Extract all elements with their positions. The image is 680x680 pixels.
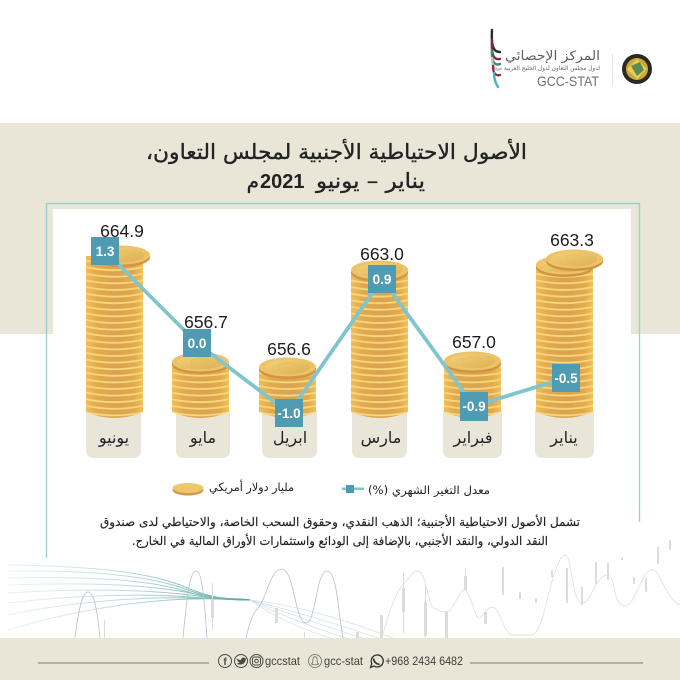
decorative background chart <box>8 555 680 638</box>
value labels: 656.6 <box>267 339 311 359</box>
description text: تشمل الأصول الاحتياطية الأجنبية؛ الذهب النقدي، وحقوق السحب الخاصة، والاحتياطي لدى صندوق <box>100 514 580 530</box>
month labels: ابريل <box>273 428 307 448</box>
logo subtitle: لدول مجلس التعاون لدول الخليج العربية <box>504 65 600 72</box>
icon: instagram <box>250 654 263 668</box>
month labels: مارس <box>361 428 401 448</box>
white chart panel <box>53 209 631 638</box>
phone number: +968 2434 6482 <box>385 654 463 668</box>
footer contact bar <box>38 654 643 668</box>
month labels: فبراير <box>452 428 493 448</box>
change markers <box>91 237 580 427</box>
logo Arabic name: المركز الإحصائي <box>505 49 600 64</box>
coin stack: March <box>351 260 408 418</box>
icon: whatsapp <box>370 655 383 668</box>
handle: gccstat: gccstat <box>265 654 301 668</box>
icon: facebook: f <box>223 657 227 668</box>
logo GCC-STAT wordmark: GCC-STAT <box>537 73 599 89</box>
change markers: -1.0 <box>277 406 301 421</box>
decorative candlesticks <box>104 540 671 638</box>
value labels <box>100 221 594 359</box>
line: monthly change rate <box>105 251 566 413</box>
description text: النقد الدولي، والنقد الأجنبي، بالإضافة إلى الودائع واستثمارات الأوراق المالية في الخارج. <box>132 533 548 549</box>
value labels: 664.9 <box>100 221 144 241</box>
legend: coin <box>172 479 294 496</box>
value labels: 656.7 <box>184 312 228 332</box>
coin stack: February <box>444 352 501 418</box>
change markers: -0.9 <box>462 399 486 414</box>
month labels: يناير <box>549 428 578 448</box>
footer band <box>0 638 680 680</box>
icon: facebook <box>218 654 232 668</box>
month label boxes <box>86 405 594 458</box>
change markers: 0.0 <box>188 336 206 351</box>
title: م <box>247 169 259 193</box>
icon: snapchat <box>308 654 322 668</box>
legend: line: معدل التغير الشهري (%) <box>368 483 490 498</box>
emblem <box>622 54 652 84</box>
change markers: 0.9 <box>373 272 391 287</box>
description text <box>100 514 580 549</box>
coin stack: April <box>259 358 316 418</box>
beige title band <box>0 123 680 334</box>
month labels: مايو <box>189 428 216 448</box>
coin stack: June <box>86 246 150 418</box>
logo ribbon <box>492 30 501 87</box>
icon: twitter <box>234 654 248 668</box>
handle: gcc-stat: gcc-stat <box>324 654 364 668</box>
title <box>146 139 527 193</box>
title: الأصول الاحتياطية الأجنبية لمجلس التعاون، <box>146 139 527 164</box>
month labels: يونيو <box>98 428 129 448</box>
value labels: 663.3 <box>550 230 594 250</box>
coin stack: January <box>536 250 603 418</box>
month labels <box>98 428 578 448</box>
logo: GCC-STAT <box>492 30 652 89</box>
change markers: -0.5 <box>554 371 578 386</box>
title: 2021 <box>260 171 304 193</box>
legend: coin: مليار دولار أمريكي <box>209 479 294 495</box>
value labels: 657.0 <box>452 332 496 352</box>
coin stack: May <box>172 352 229 418</box>
change markers: 1.3 <box>96 244 115 259</box>
value labels: 663.0 <box>360 244 404 264</box>
title: يناير – يونيو <box>315 169 425 193</box>
teal frame <box>46 204 640 558</box>
